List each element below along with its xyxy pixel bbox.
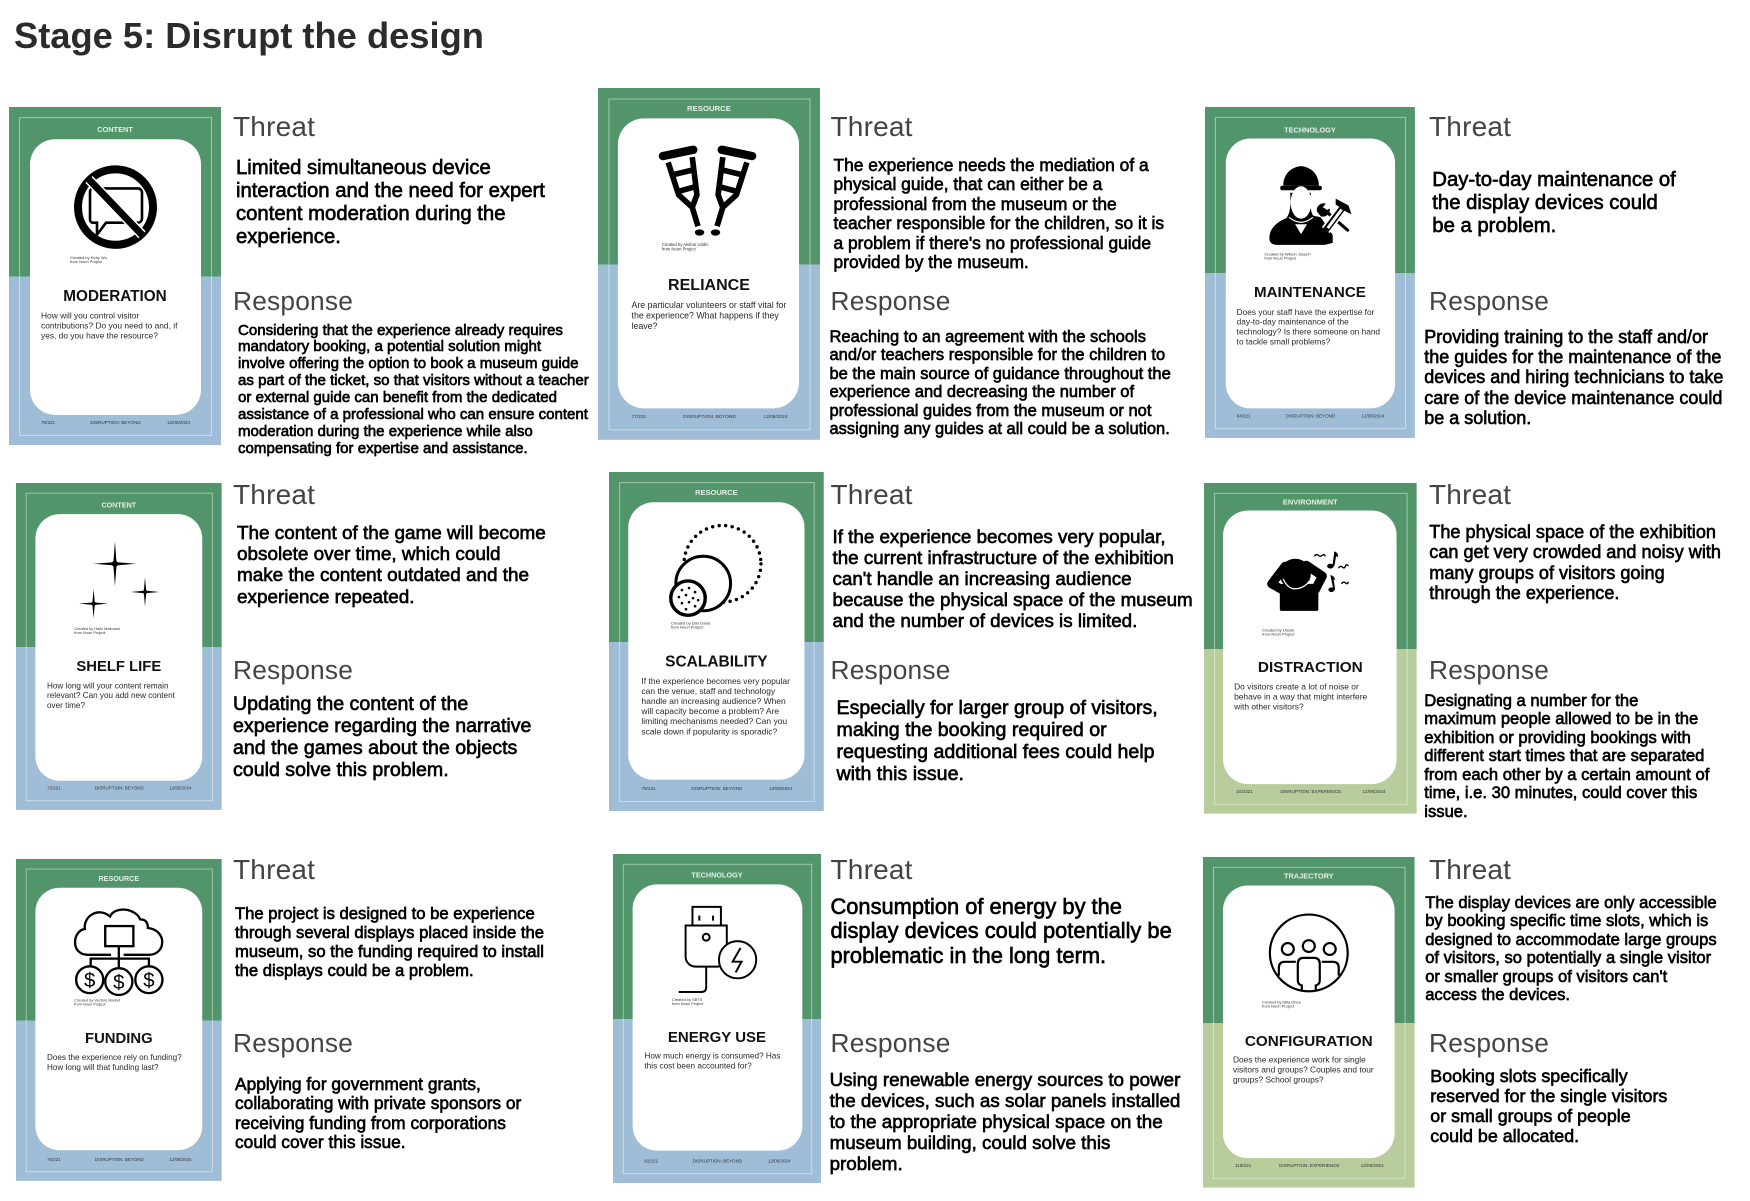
threat text 5: and the number of devices is limited. <box>832 610 1137 631</box>
response text 1: assistance of a professional who can ensure content <box>238 406 588 423</box>
icon credit: Created by SBTS <box>671 996 702 1001</box>
heading: threat 8: Threat <box>830 854 913 884</box>
response text 7: Applying for government grants, <box>235 1074 481 1094</box>
card question <box>47 1052 182 1072</box>
icon credit <box>662 242 708 252</box>
threat text 3: Day-to-day maintenance of <box>1432 169 1676 191</box>
response text 9: Booking slots specifically <box>1430 1066 1628 1086</box>
threat text 8: Consumption of energy by the <box>830 894 1122 918</box>
threat text 1: Limited simultaneous device <box>236 157 491 179</box>
card footer <box>47 785 192 790</box>
threat text 7: The project is designed to be experience <box>235 904 535 923</box>
card footer: DISRUPTION: BEYOND <box>90 420 141 425</box>
threat text 8: display devices could potentially be <box>830 918 1172 943</box>
response text 6: issue. <box>1424 802 1468 821</box>
response text 6: time, i.e. 30 minutes, could cover this <box>1424 783 1697 802</box>
response text 1: as part of the ticket, so that visitors without a teacher <box>238 372 589 389</box>
threat text 5: the current infrastructure of the exhibition <box>832 547 1174 568</box>
icon: crutches <box>658 146 756 236</box>
response text 5: with this issue. <box>836 763 964 785</box>
threat text 2: The experience needs the mediation of a <box>834 155 1149 175</box>
card footer: 12/08/2024 <box>769 785 792 790</box>
response text 8: to the appropriate physical space on the <box>830 1110 1163 1132</box>
card question <box>641 675 790 736</box>
response text 3: be a solution. <box>1424 408 1531 428</box>
response text 9: reserved for the single visitors <box>1430 1086 1667 1106</box>
card question <box>1233 1054 1374 1084</box>
card question: visitors and groups? Couples and tour <box>1233 1064 1374 1074</box>
card footer: 72/221 <box>47 785 61 790</box>
icon: cloud funding: $ <box>113 971 124 993</box>
icon credit <box>671 997 703 1006</box>
threat text 5: can't handle an increasing audience <box>832 568 1132 589</box>
threat text 9: The display devices are only accessible <box>1425 893 1717 912</box>
card footer <box>1236 413 1384 418</box>
icon credit <box>1262 627 1295 637</box>
card category: RESOURCE <box>695 488 738 497</box>
threat text 7: through several displays placed inside the <box>235 923 544 942</box>
threat text 9: or smaller groups of visitors can't <box>1425 967 1667 986</box>
response text 7: could cover this issue. <box>235 1132 406 1152</box>
response text 1: involve offering the option to book a museum guide <box>238 355 579 372</box>
card footer: DISRUPTION: BEYOND <box>95 1156 144 1161</box>
card question: Does the experience work for single <box>1233 1054 1366 1064</box>
response text 3: the guides for the maintenance of the <box>1424 347 1721 367</box>
threat text 2: provided by the museum. <box>834 252 1029 272</box>
heading: threat 2: Threat <box>830 111 913 142</box>
card question <box>1234 682 1368 711</box>
card footer: 12/06/2024 <box>1363 789 1386 794</box>
card footer: DISRUPTION: BEYOND <box>1286 413 1335 418</box>
response text 7: receiving funding from corporations <box>235 1112 506 1132</box>
card footer: 12/08/2024 <box>167 420 190 425</box>
response text 4: experience regarding the narrative <box>233 715 531 737</box>
card footer: 12/06/2024 <box>768 1158 790 1163</box>
card footer: 12/06/2024 <box>1361 413 1384 418</box>
heading: response 1: Response <box>233 286 353 316</box>
response text 5 <box>836 697 1158 785</box>
card: reliance <box>598 88 820 440</box>
card question: leave? <box>632 320 657 331</box>
card category: CONTENT <box>101 500 136 509</box>
card title: SCALABILITY <box>665 653 768 670</box>
response text 3: Providing training to the staff and/or <box>1424 327 1708 347</box>
threat text 9: by booking specific time slots, which is <box>1425 911 1708 930</box>
card question: groups? School groups? <box>1233 1074 1324 1084</box>
response text 1: Considering that the experience already requires <box>238 322 563 338</box>
icon credit: Created by Dan Davis <box>671 620 710 625</box>
card: scalability <box>609 472 824 811</box>
icon: no chat bubble <box>74 165 157 249</box>
card question: contributions? Do you need to and, if <box>41 320 177 330</box>
card question <box>47 680 175 709</box>
heading: response 4: Response <box>233 655 353 685</box>
card title: MAINTENANCE <box>1254 284 1366 301</box>
response text 4: Updating the content of the <box>233 693 468 715</box>
heading: response 7: Response <box>233 1028 353 1058</box>
card title: RELIANCE <box>668 276 750 294</box>
icon: cloud funding: $ <box>143 969 155 991</box>
card question: behave in a way that might interfere <box>1234 691 1368 701</box>
icon credit <box>74 626 120 635</box>
card footer <box>641 785 792 790</box>
card question: How long will that funding last? <box>47 1062 159 1071</box>
card question: over time? <box>47 700 85 709</box>
threat text 7: museum, so the funding required to install <box>235 942 544 961</box>
threat text 8 <box>830 894 1172 969</box>
icon credit: from Noun Project <box>671 1001 703 1006</box>
card title: SHELF LIFE <box>76 658 161 674</box>
response text 3: care of the device maintenance could <box>1424 388 1722 408</box>
card question: yes, do you have the resource? <box>41 330 158 340</box>
icon credit: from Noun Project <box>671 624 703 629</box>
card footer: DISRUPTION: BEYOND <box>692 1158 742 1163</box>
card footer: 12/06/2024 <box>763 414 788 419</box>
threat text 4: obsolete over time, which could <box>237 544 501 565</box>
card question: the experience? What happens if they <box>632 310 779 320</box>
icon credit: Created by Dilla Dhee <box>1262 999 1301 1004</box>
card category: TECHNOLOGY <box>691 870 742 879</box>
response text 8: problem. <box>830 1152 903 1174</box>
card category: RESOURCE <box>98 874 139 882</box>
response text 2: experience and decreasing the number of <box>830 383 1134 401</box>
card question: limiting mechanisms needed? Can you <box>641 716 787 726</box>
threat text 2: professional from the museum or the <box>834 194 1117 214</box>
threat text 7 <box>235 904 544 980</box>
threat text 1: content moderation during the <box>236 203 505 225</box>
heading: threat 6: Threat <box>1429 479 1511 510</box>
threat text 4: make the content outdated and the <box>237 565 529 586</box>
threat text 3 <box>1432 169 1676 237</box>
threat text 2: a problem if there's no professional guide <box>834 233 1151 253</box>
card title: FUNDING <box>85 1030 153 1046</box>
response text 8: the devices, such as solar panels installed <box>830 1090 1180 1110</box>
heading: threat 1: Threat <box>233 111 315 142</box>
card: moderation <box>9 107 221 445</box>
icon credit: Created by Hafiz Maimanri <box>74 626 120 630</box>
response text 9 <box>1430 1066 1667 1146</box>
heading: threat 9: Threat <box>1429 854 1511 884</box>
card footer <box>1236 789 1386 794</box>
icon: sparkles <box>79 542 160 618</box>
response text 2: Reaching to an agreement with the schools <box>830 328 1146 346</box>
card question: will capacity become a problem? Are <box>641 706 779 716</box>
response text 6: maximum people allowed to be in the <box>1424 709 1698 728</box>
icon: cloud funding <box>74 908 164 996</box>
card footer <box>644 1158 790 1164</box>
card footer: 12/06/2024 <box>1361 1163 1384 1168</box>
card: funding <box>16 858 222 1180</box>
heading: response 2: Response <box>830 286 951 316</box>
icon credit: from Noun Project <box>70 259 102 264</box>
response text 4: and the games about the objects <box>233 737 517 759</box>
threat text 2: teacher responsible for the children, so it is <box>834 213 1164 233</box>
card question: can the venue, staff and technology <box>641 686 775 696</box>
threat text 3: be a problem. <box>1432 215 1556 237</box>
response text 5: making the booking required or <box>836 719 1107 741</box>
threat text 4 <box>237 523 546 608</box>
threat text 9: access the devices. <box>1425 985 1570 1004</box>
card: shelf life <box>16 483 222 810</box>
icon: technician <box>1269 166 1352 245</box>
response text 1 <box>238 322 589 457</box>
card question: How much energy is consumed? Has <box>644 1050 780 1060</box>
heading: response 9: Response <box>1429 1028 1549 1058</box>
icon credit: from Noun Project <box>74 630 105 635</box>
icon credit: Created by Wilson Joseph <box>1264 252 1311 257</box>
threat text 6: can get very crowded and noisy with <box>1429 542 1721 562</box>
threat text 9 <box>1425 894 1717 1005</box>
response text 1: compensating for expertise and assistance. <box>238 440 528 457</box>
card category: ENVIRONMENT <box>1283 498 1338 506</box>
response text 4 <box>233 693 531 781</box>
response text 8: Using renewable energy sources to power <box>830 1068 1180 1090</box>
card question: How long will your content remain <box>47 680 169 690</box>
response text 7 <box>235 1074 521 1152</box>
card footer: 12/06/2024 <box>169 1156 192 1161</box>
response text 2: and/or teachers responsible for the children to <box>830 346 1165 364</box>
threat text 4: The content of the game will become <box>237 523 546 544</box>
response text 6: Designating a number for the <box>1424 691 1638 710</box>
response text 3 <box>1424 327 1723 428</box>
threat text 1: experience. <box>236 226 341 248</box>
response text 6: different start times that are separated <box>1424 746 1704 765</box>
card footer: 79/221 <box>641 785 656 790</box>
card footer: DISRUPTION: BEYOND <box>691 785 742 790</box>
icon credit: Created by Vectors Market <box>74 997 120 1002</box>
threat text 6: many groups of visitors going <box>1429 563 1665 583</box>
card: maintenance <box>1205 107 1415 438</box>
response text 2 <box>830 328 1171 438</box>
threat text 9: of visitors, so potentially a single visitor <box>1425 948 1711 967</box>
card: energy use <box>613 854 821 1182</box>
title: Stage 5: Disrupt the design <box>14 15 484 56</box>
card: distraction <box>1204 483 1417 813</box>
response text 8: museum building, could solve this <box>830 1132 1110 1152</box>
threat text 6: The physical space of the exhibition <box>1429 522 1716 542</box>
response text 1: or external guide can benefit from the dedicated <box>238 389 557 406</box>
icon: covering ears from noise <box>1267 551 1350 611</box>
heading: threat 7: Threat <box>233 854 315 884</box>
heading: response 5: Response <box>830 655 951 685</box>
card question <box>1236 307 1380 346</box>
card footer: 82/221 <box>644 1158 658 1163</box>
heading: response 8: Response <box>830 1028 951 1058</box>
card question: Does the experience rely on funding? <box>47 1052 182 1062</box>
response text 6: from each other by a certain amount of <box>1424 765 1709 784</box>
response text 1: moderation during the experience while also <box>238 423 533 440</box>
card category: CONTENT <box>97 125 133 134</box>
card title: MODERATION <box>63 288 167 305</box>
card footer <box>47 1156 192 1161</box>
card question: to tackle small problems? <box>1237 337 1330 346</box>
card: configuration <box>1203 857 1415 1187</box>
card footer <box>41 420 190 425</box>
response text 2: assigning any guides at all could be a solution. <box>830 420 1170 438</box>
card footer: 102/221 <box>1236 789 1253 794</box>
card footer: 77/221 <box>632 414 646 419</box>
heading: response 6: Response <box>1429 655 1549 685</box>
threat text 9: designed to accommodate large groups <box>1425 930 1717 949</box>
card question <box>632 299 786 331</box>
card question: Are particular volunteers or staff vital for <box>632 299 786 310</box>
icon credit: from Noun Project <box>1263 632 1295 637</box>
heading: threat 3: Threat <box>1429 111 1511 142</box>
card question: day-to-day maintenance of the <box>1237 317 1349 327</box>
threat text 2 <box>833 155 1164 272</box>
threat text 5 <box>832 526 1193 631</box>
card title: ENERGY USE <box>668 1029 766 1045</box>
response text 6 <box>1424 691 1710 821</box>
icon: group of people in circle <box>1203 857 1415 1187</box>
icon credit: from Noun Project <box>1264 256 1296 261</box>
card question <box>41 310 178 340</box>
card question: with other visitors? <box>1234 701 1304 711</box>
response text 7: collaborating with private sponsors or <box>235 1093 521 1113</box>
card question: handle an increasing audience? When <box>641 696 786 706</box>
icon: growing circles <box>669 524 763 617</box>
response text 9: could be allocated. <box>1430 1126 1579 1146</box>
icon: usb plug with bolt <box>613 854 821 1182</box>
icon credit <box>1262 1000 1301 1009</box>
card category: TECHNOLOGY <box>1284 126 1336 135</box>
icon credit <box>670 620 710 630</box>
threat text 7: the displays could be a problem. <box>235 961 474 980</box>
response text 2: professional guides from the museum or not <box>830 402 1151 420</box>
response text 8 <box>830 1068 1180 1174</box>
card question: scale down if popularity is sporadic? <box>641 726 777 736</box>
icon credit: Created by Kirby Wu <box>70 255 107 260</box>
card category: TRAJECTORY <box>1284 871 1334 880</box>
threat text 3: the display devices could <box>1432 192 1658 214</box>
threat text 4: experience repeated. <box>237 587 414 608</box>
card footer: 84/221 <box>1237 413 1251 418</box>
icon credit: Created by Akshar Uddin <box>662 242 708 247</box>
threat text 6 <box>1429 522 1721 604</box>
threat text 5: If the experience becomes very popular, <box>832 526 1166 547</box>
icon credit: from Noun Project <box>74 1002 105 1006</box>
response text 9: or small groups of people <box>1430 1106 1631 1126</box>
card question: technology? Is there someone on hand <box>1237 327 1380 337</box>
card question: Does your staff have the expertise for <box>1237 307 1374 317</box>
heading: response 3: Response <box>1429 286 1549 316</box>
response text 1: mandatory booking, a potential solution might <box>238 338 541 355</box>
icon credit: from Noun Project <box>662 247 696 252</box>
card title: CONFIGURATION <box>1245 1033 1373 1049</box>
card question <box>644 1050 780 1070</box>
card title: DISTRACTION <box>1258 659 1363 676</box>
response text 3: devices and hiring technicians to take <box>1424 367 1723 387</box>
threat text 8: problematic in the long term. <box>830 943 1106 968</box>
heading: threat 4: Threat <box>233 479 315 510</box>
card question: Do visitors create a lot of noise or <box>1234 682 1359 691</box>
icon credit <box>70 255 107 264</box>
response text 2: be the main source of guidance throughout the <box>830 365 1171 383</box>
threat text 6: through the experience. <box>1429 583 1619 603</box>
card footer <box>1235 1163 1384 1169</box>
icon credit <box>1264 252 1311 261</box>
response text 5: requesting additional fees could help <box>836 741 1155 763</box>
threat text 1 <box>236 157 546 248</box>
card footer: 115/221 <box>1235 1163 1252 1168</box>
threat text 5: because the physical space of the museum <box>832 589 1193 610</box>
card footer: DISRUPTION: BEYOND <box>683 414 736 419</box>
response text 6: exhibition or providing bookings with <box>1424 728 1691 747</box>
card question: this cost been accounted for? <box>644 1060 751 1070</box>
card footer <box>632 414 788 419</box>
card footer: 76/221 <box>47 1156 61 1161</box>
card footer: 12/06/2024 <box>169 785 192 790</box>
card question: If the experience becomes very popular <box>641 675 790 686</box>
threat text 2: physical guide, that can either be a <box>834 174 1102 194</box>
card footer: DISRUPTION: EXPERIENCE <box>1281 789 1342 794</box>
icon credit <box>74 997 120 1006</box>
icon: cloud funding: $ <box>84 969 95 991</box>
threat text 1: interaction and the need for expert <box>236 180 545 202</box>
response text 4: could solve this problem. <box>233 759 449 781</box>
card footer: 79/221 <box>41 420 55 425</box>
icon credit: from Noun Project <box>1262 1004 1294 1009</box>
response text 5: Especially for larger group of visitors, <box>836 697 1158 719</box>
card footer: DISRUPTION: EXPERIENCE <box>1279 1163 1340 1168</box>
card question: How will you control visitor <box>41 310 139 320</box>
card question: relevant? Can you add new content <box>47 690 175 700</box>
card footer: DISRUPTION: BEYOND <box>95 785 144 790</box>
icon credit: Created by Llisole <box>1263 627 1295 632</box>
heading: threat 5: Threat <box>830 479 913 510</box>
card category: RESOURCE <box>687 104 731 113</box>
